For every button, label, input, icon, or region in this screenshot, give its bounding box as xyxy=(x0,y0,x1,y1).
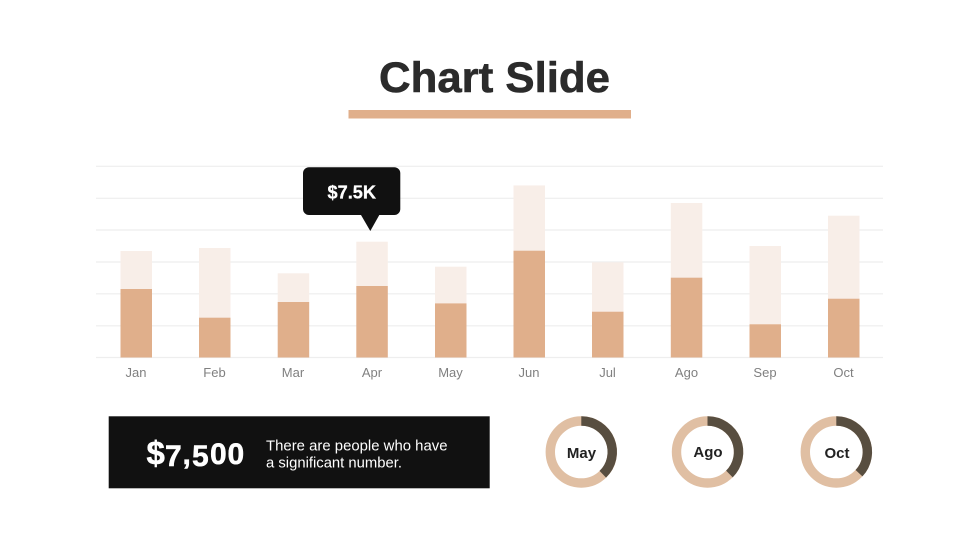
bar: Jun xyxy=(514,185,545,358)
callout text: a significant number. xyxy=(266,455,402,472)
callout text: There are people who have xyxy=(266,438,448,455)
donut: Ago: Ago xyxy=(693,444,723,461)
donut: May: May xyxy=(567,445,597,462)
donut: Oct xyxy=(805,421,867,483)
donut: Ago xyxy=(676,421,739,483)
month labels: Ago xyxy=(675,365,698,380)
month labels: Jan xyxy=(126,365,146,380)
month labels: Mar xyxy=(282,365,305,380)
donut: May xyxy=(550,421,612,483)
tooltip: $7.5K on April: $7.5K xyxy=(328,182,376,202)
bar: Apr xyxy=(356,242,388,358)
bar: Jan xyxy=(120,251,152,358)
month labels: Sep xyxy=(753,365,777,380)
bar: Feb xyxy=(199,248,230,358)
callout figure: 7 xyxy=(165,440,182,473)
callout text xyxy=(266,438,448,472)
month labels: Feb xyxy=(203,365,226,380)
month labels: Apr xyxy=(362,365,383,380)
callout figure: , xyxy=(182,438,191,471)
bar chart xyxy=(96,166,883,380)
bar: Oct xyxy=(828,216,860,358)
tooltip: $7.5K on April xyxy=(303,167,400,231)
bar: Ago xyxy=(671,203,702,358)
callout figure: 0 xyxy=(210,438,227,471)
title: Chart Slide xyxy=(379,54,610,102)
callout figure: 5 xyxy=(192,440,209,473)
bar: May xyxy=(435,267,466,358)
month labels: May xyxy=(438,365,463,380)
donut: Oct: Oct xyxy=(824,445,850,462)
month labels: Jun xyxy=(519,365,539,380)
callout panel xyxy=(109,416,490,488)
month labels xyxy=(126,365,854,380)
callout figure: 0 xyxy=(228,438,244,471)
month labels: Oct xyxy=(833,365,854,380)
title underline xyxy=(348,110,631,118)
callout figure: $ xyxy=(146,434,165,472)
bar: Mar xyxy=(278,273,309,358)
bar: Jul xyxy=(592,262,624,358)
bar: Sep xyxy=(750,246,781,358)
month labels: Jul xyxy=(599,365,616,380)
